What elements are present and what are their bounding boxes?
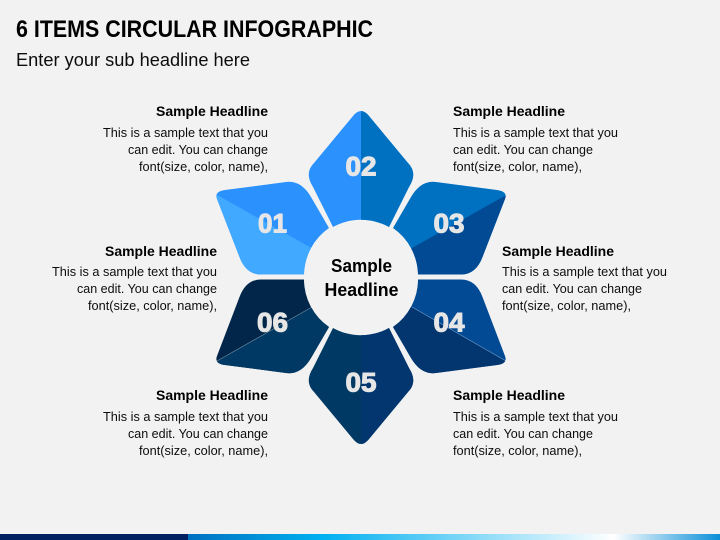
text block 06: Sample Headline xyxy=(105,243,217,259)
petal 03: 03 xyxy=(434,208,464,238)
text block 02: Sample Headline xyxy=(453,103,565,119)
text block 02: This is a sample text that you xyxy=(453,125,618,140)
center circle: Headline xyxy=(324,280,398,300)
text block 05: can edit. You can change xyxy=(128,426,268,441)
petal 06 xyxy=(216,280,329,373)
text block 06: font(size, color, name), xyxy=(88,298,217,313)
text block 01: can edit. You can change xyxy=(128,142,268,157)
petal 04: 04 xyxy=(434,308,464,338)
petal 01 xyxy=(216,182,329,274)
text block 03: can edit. You can change xyxy=(502,281,642,296)
text block 01: This is a sample text that you xyxy=(103,125,268,140)
text block 06: can edit. You can change xyxy=(77,281,217,296)
text block 05 xyxy=(103,387,268,458)
text block 02: can edit. You can change xyxy=(453,142,593,157)
text block 03: font(size, color, name), xyxy=(502,298,631,313)
text block 05: Sample Headline xyxy=(156,387,268,403)
text block 03: This is a sample text that you xyxy=(502,264,667,279)
text block 06 xyxy=(52,243,217,313)
text block 01: Sample Headline xyxy=(156,103,268,119)
center circle: Sample xyxy=(331,256,392,276)
petal 06: 06 xyxy=(257,308,288,338)
petal 05 xyxy=(309,328,413,444)
petal 05: 05 xyxy=(346,368,376,398)
center circle xyxy=(304,220,418,334)
text block 04: This is a sample text that you xyxy=(453,409,618,424)
text block 05: This is a sample text that you xyxy=(103,409,268,424)
text block 02 xyxy=(453,103,618,174)
text block 03 xyxy=(502,243,667,313)
text block 04: font(size, color, name), xyxy=(453,443,582,458)
text block 04 xyxy=(453,387,618,458)
text block 04: Sample Headline xyxy=(453,387,565,403)
text block 05: font(size, color, name), xyxy=(139,443,268,458)
text block 01: font(size, color, name), xyxy=(139,159,268,174)
petal 02 xyxy=(309,111,413,227)
subtitle: Enter your sub headline here xyxy=(16,50,250,70)
text block 03: Sample Headline xyxy=(502,243,614,259)
petal 03 xyxy=(393,182,506,274)
text block 01 xyxy=(103,103,268,174)
petal 01: 01 xyxy=(258,208,287,238)
text block 06: This is a sample text that you xyxy=(52,264,217,279)
footer bar xyxy=(0,534,720,540)
text block 04: can edit. You can change xyxy=(453,426,593,441)
text block 02: font(size, color, name), xyxy=(453,159,582,174)
petal 02: 02 xyxy=(346,152,376,182)
title: 6 ITEMS CIRCULAR INFOGRAPHIC xyxy=(16,16,373,43)
petal 04 xyxy=(393,280,506,373)
